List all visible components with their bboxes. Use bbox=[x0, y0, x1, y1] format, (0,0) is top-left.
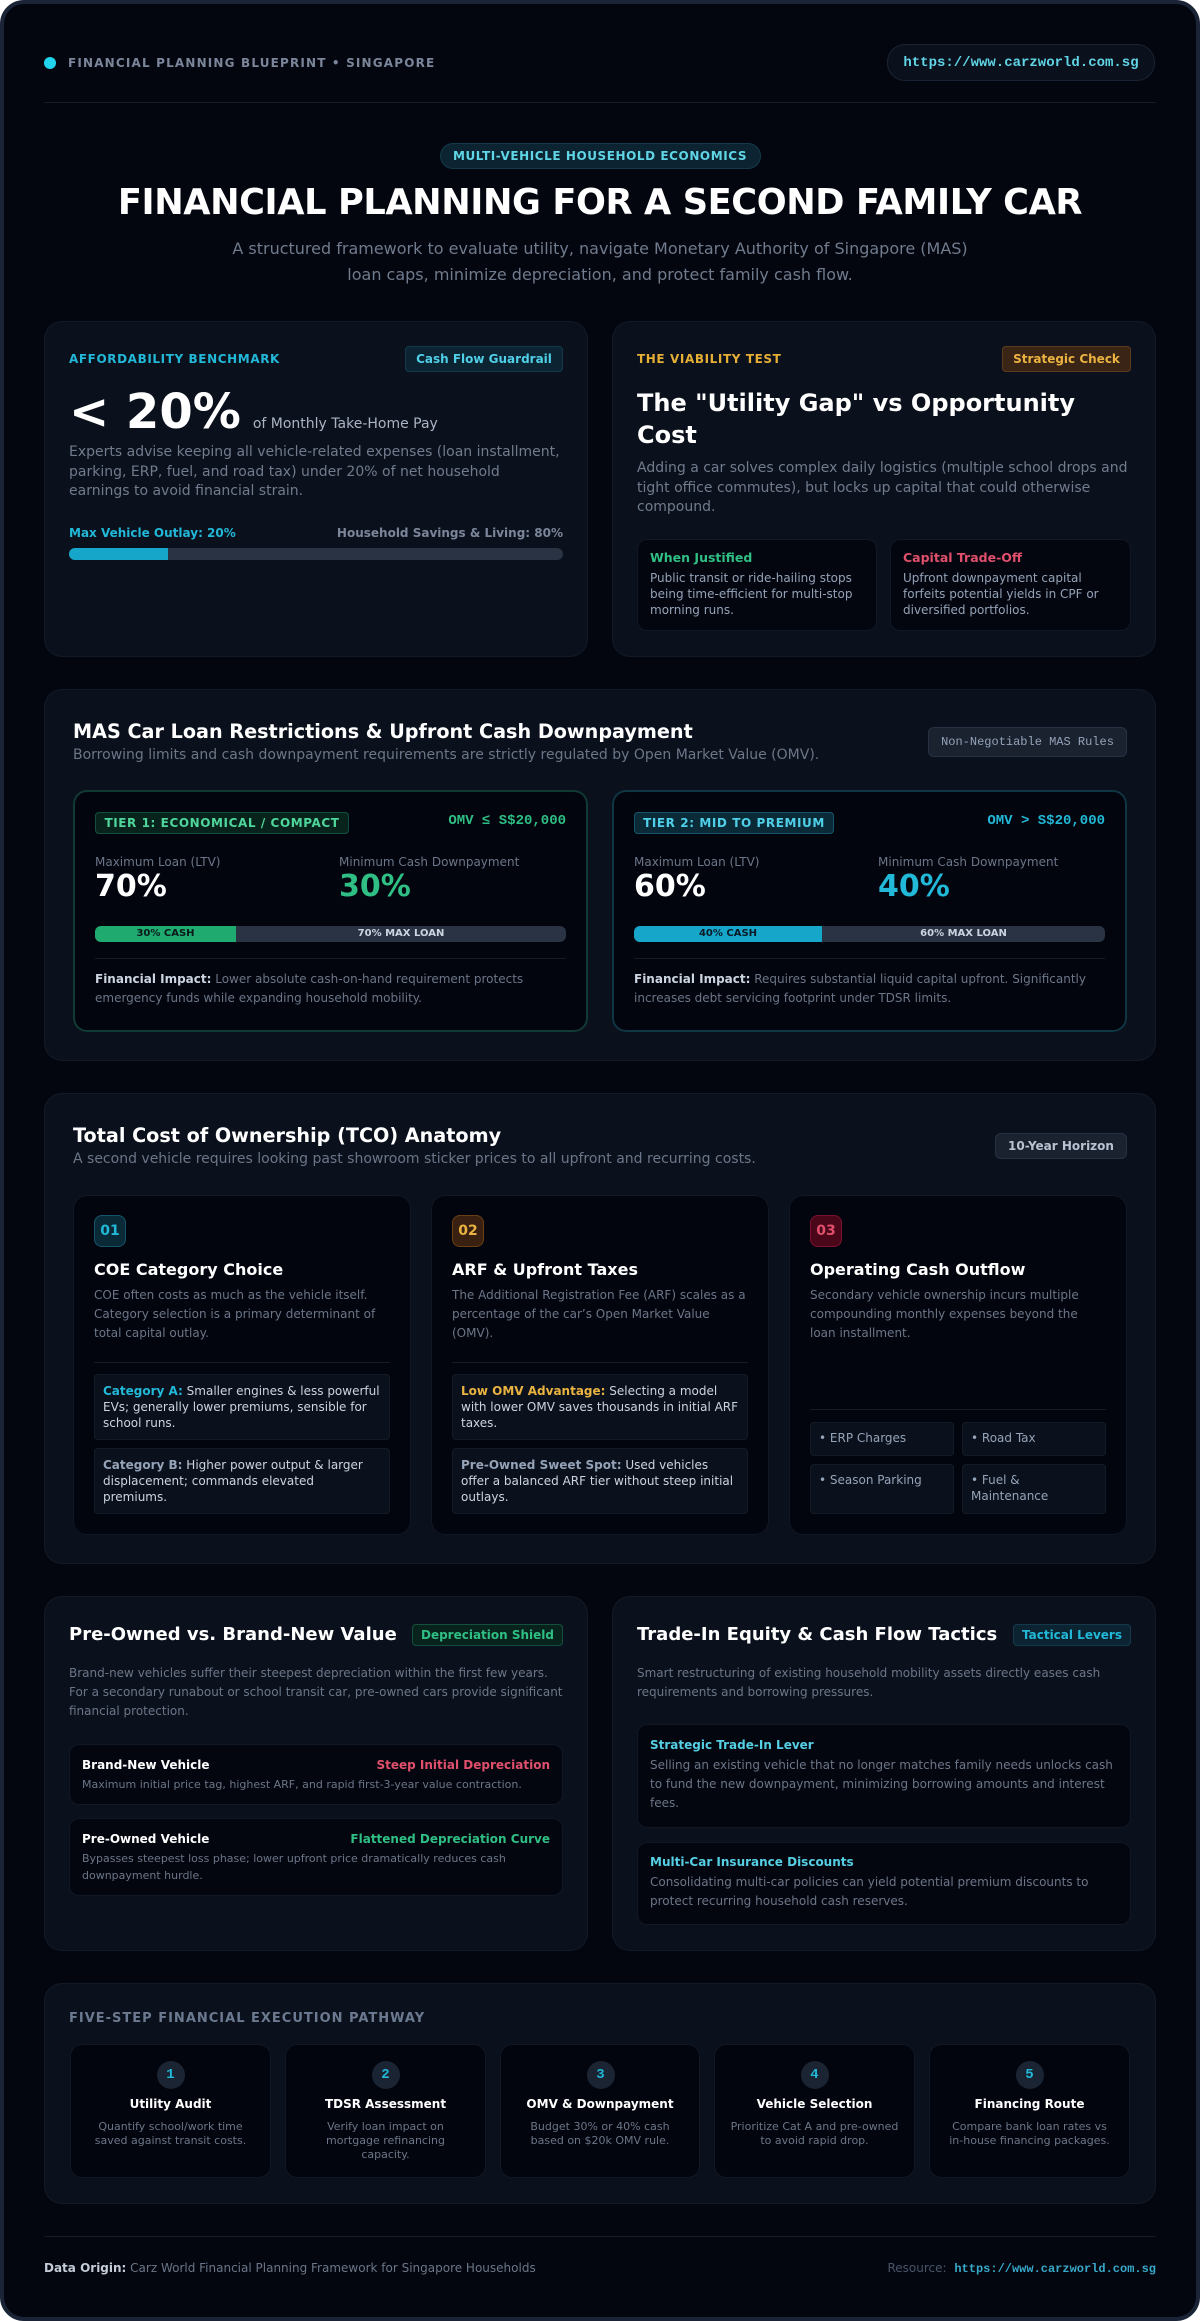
sweet spot text: Pre-Owned Sweet Spot: Used vehicles bbox=[461, 1458, 708, 1472]
expense: road tax bbox=[962, 1422, 1106, 1456]
tier badge bbox=[634, 812, 834, 834]
tactic title: Multi-Car Insurance Discounts bbox=[650, 1855, 854, 1869]
financial impact note: emergency funds while expanding household mobility. bbox=[95, 991, 422, 1005]
tier badge: TIER 1: ECONOMICAL / COMPACT bbox=[104, 816, 340, 830]
step 2 bbox=[285, 2044, 486, 2178]
panel: viability test bbox=[612, 321, 1156, 657]
financial impact note: Financial Impact: Lower absolute cash-on-hand requirement protects bbox=[95, 972, 523, 986]
step text bbox=[95, 2120, 246, 2147]
tactic: strategic trade-in bbox=[637, 1724, 1131, 1828]
tier badge: TIER 2: MID TO PREMIUM bbox=[643, 816, 825, 830]
low OMV text: taxes. bbox=[461, 1416, 497, 1430]
financial impact note bbox=[634, 972, 1086, 1005]
tag: cash flow guardrail bbox=[405, 346, 563, 372]
step text: Verify loan impact on bbox=[327, 2120, 444, 2133]
number badge 01 bbox=[94, 1215, 126, 1247]
card text: Upfront downpayment capital bbox=[903, 571, 1082, 585]
category A text bbox=[103, 1384, 380, 1430]
step text: to avoid rapid drop. bbox=[760, 2134, 869, 2147]
downpayment label: Minimum Cash Downpayment bbox=[878, 855, 1058, 869]
loan label: Maximum Loan (LTV) bbox=[95, 855, 220, 869]
panel heading: The "Utility Gap" vs Opportunity bbox=[637, 389, 1075, 417]
tag: 10-year horizon bbox=[995, 1133, 1127, 1159]
panel eyebrow: AFFORDABILITY BENCHMARK bbox=[69, 352, 280, 366]
tier card: economical compact bbox=[73, 790, 588, 1032]
tag: depreciation shield bbox=[412, 1624, 563, 1646]
row verdict: Steep Initial Depreciation bbox=[376, 1758, 550, 1772]
row title: Brand-New Vehicle bbox=[82, 1758, 210, 1772]
sweet spot text: offer a balanced ARF tier without steep initial bbox=[461, 1474, 733, 1488]
panel: five-step pathway bbox=[44, 1983, 1156, 2204]
step text: saved against transit costs. bbox=[95, 2134, 246, 2147]
card text: being time-efficient for multi-stop bbox=[650, 587, 852, 601]
step 4 bbox=[714, 2044, 915, 2178]
step text: in-house financing packages. bbox=[949, 2134, 1110, 2147]
fuel text bbox=[971, 1473, 1048, 1503]
panel description bbox=[69, 1666, 562, 1718]
road tax text: • Road Tax bbox=[971, 1431, 1036, 1445]
benchmark description: Experts advise keeping all vehicle-related expenses (loan installment, bbox=[69, 444, 560, 460]
financial impact note: increases debt servicing footprint under TDSR limits. bbox=[634, 991, 951, 1005]
financial impact note: Financial Impact: Requires substantial liquid capital upfront. Significantly bbox=[634, 972, 1086, 986]
footer: data origin: Data Origin: Carz World Financial Planning Framework for Singapore Households bbox=[44, 2261, 536, 2275]
card text bbox=[903, 571, 1099, 617]
tactic text: fees. bbox=[650, 1796, 679, 1810]
tag: tactical levers bbox=[1013, 1624, 1131, 1646]
tactic: multi-car insurance bbox=[637, 1842, 1131, 1925]
downpayment value: 30% bbox=[339, 869, 411, 904]
panel: total cost of ownership bbox=[44, 1093, 1156, 1564]
tag: tactical levers: Tactical Levers bbox=[1022, 1628, 1122, 1642]
step number: 4 bbox=[810, 2067, 819, 2083]
card text: diversified portfolios. bbox=[903, 603, 1030, 617]
header eyebrow bbox=[44, 56, 435, 70]
benchmark description: earnings to avoid financial strain. bbox=[69, 483, 303, 499]
panel eyebrow: THE VIABILITY TEST bbox=[637, 352, 781, 366]
step text: Compare bank loan rates vs bbox=[952, 2120, 1107, 2133]
panel description: For a secondary runabout or school transit car, pre-owned cars provide significant bbox=[69, 1685, 562, 1699]
number badge 02: 02 bbox=[458, 1223, 478, 1239]
card description bbox=[810, 1288, 1079, 1340]
ERP text: • ERP Charges bbox=[819, 1431, 906, 1445]
step text: Quantify school/work time bbox=[98, 2120, 243, 2133]
step text: Budget 30% or 40% cash bbox=[530, 2120, 670, 2133]
comparison: pre-owned vehicle bbox=[69, 1818, 563, 1896]
category A text: school runs. bbox=[103, 1416, 176, 1430]
category B text bbox=[103, 1458, 363, 1504]
category A text: Category A: Smaller engines & less powerful bbox=[103, 1384, 380, 1398]
step 5 bbox=[929, 2044, 1130, 2178]
tier badge bbox=[95, 812, 349, 834]
tag: strategic check bbox=[1002, 346, 1131, 372]
tag: cash flow guardrail: Cash Flow Guardrail bbox=[416, 352, 552, 366]
step number bbox=[156, 2061, 184, 2089]
row description bbox=[82, 1852, 506, 1882]
category A text: EVs; generally lower premiums, sensible for bbox=[103, 1400, 367, 1414]
panel: trade-in equity bbox=[612, 1596, 1156, 1951]
card text bbox=[650, 571, 852, 617]
card description bbox=[94, 1288, 376, 1340]
split bar: 30 cash, 70 loan bbox=[95, 926, 566, 942]
panel heading: Trade-In Equity & Cash Flow Tactics bbox=[637, 1624, 997, 1645]
step text: mortgage refinancing bbox=[326, 2134, 445, 2147]
panel description: Smart restructuring of existing household mobility assets directly eases cash bbox=[637, 1666, 1100, 1680]
expense: season parking bbox=[810, 1464, 954, 1514]
step text bbox=[326, 2120, 445, 2161]
panel heading: Pre-Owned vs. Brand-New Value bbox=[69, 1624, 397, 1645]
viability description bbox=[637, 460, 1128, 515]
card heading: ARF & Upfront Taxes bbox=[452, 1260, 638, 1279]
split bar: 40 cash, 60 loan bbox=[634, 926, 1105, 942]
section subheading: A second vehicle requires looking past showroom sticker prices to all upfront and recurring costs. bbox=[73, 1151, 756, 1167]
step number bbox=[1016, 2061, 1044, 2089]
panel description: financial protection. bbox=[69, 1704, 189, 1718]
step number: 3 bbox=[596, 2067, 605, 2083]
detail: category B bbox=[94, 1448, 390, 1514]
tactic text: to fund the new downpayment, minimizing borrowing amounts and interest bbox=[650, 1777, 1105, 1791]
loan value: 60% bbox=[634, 869, 706, 904]
cash segment bbox=[95, 926, 236, 942]
card text: Public transit or ride-hailing stops bbox=[650, 571, 852, 585]
card description: total capital outlay. bbox=[94, 1326, 209, 1340]
card description: Category selection is a primary determinant of bbox=[94, 1307, 375, 1321]
category B text: displacement; commands elevated bbox=[103, 1474, 314, 1488]
expense: ERP charges bbox=[810, 1422, 954, 1456]
row description: Bypasses steepest loss phase; lower upfront price dramatically reduces cash bbox=[82, 1852, 506, 1865]
card description: COE often costs as much as the vehicle itself. bbox=[94, 1288, 367, 1302]
detail: category A bbox=[94, 1374, 390, 1440]
panel heading: Cost bbox=[637, 421, 697, 449]
card: operating cash outflow bbox=[789, 1195, 1127, 1535]
loan segment: 60% MAX LOAN bbox=[920, 928, 1007, 939]
card description: (OMV). bbox=[452, 1326, 493, 1340]
card description: compounding monthly expenses beyond the bbox=[810, 1307, 1078, 1321]
bar label: savings and living: Household Savings & Living: 80% bbox=[337, 526, 563, 540]
bar label: vehicle outlay: Max Vehicle Outlay: 20% bbox=[69, 526, 236, 540]
category B text: Category B: Higher power output & larger bbox=[103, 1458, 363, 1472]
subtitle: loan caps, minimize depreciation, and protect family cash flow. bbox=[347, 265, 853, 284]
icon: status dot bbox=[44, 57, 56, 69]
card description bbox=[452, 1288, 746, 1340]
section heading: MAS Car Loan Restrictions & Upfront Cash Downpayment bbox=[73, 720, 693, 743]
card heading: Operating Cash Outflow bbox=[810, 1260, 1025, 1279]
card description: percentage of the car’s Open Market Value bbox=[452, 1307, 710, 1321]
downpayment label: Minimum Cash Downpayment bbox=[339, 855, 519, 869]
card: when justified bbox=[637, 539, 877, 631]
website url pill bbox=[887, 44, 1155, 81]
viability description: compound. bbox=[637, 499, 715, 515]
tactic title: Strategic Trade-In Lever bbox=[650, 1738, 814, 1752]
category badge bbox=[440, 143, 760, 169]
loan label: Maximum Loan (LTV) bbox=[634, 855, 759, 869]
row verdict: Flattened Depreciation Curve bbox=[350, 1832, 550, 1846]
number badge 01: 01 bbox=[100, 1223, 120, 1239]
benchmark description: parking, ERP, fuel, and road tax) under 20% of net household bbox=[69, 464, 500, 480]
benchmark description bbox=[69, 444, 560, 499]
low OMV text: with lower OMV saves thousands in initial ARF bbox=[461, 1400, 738, 1414]
card text: forfeits potential yields in CPF or bbox=[903, 587, 1099, 601]
cash segment: 40% CASH bbox=[699, 928, 757, 939]
OMV threshold: OMV ≤ S$20,000 bbox=[448, 813, 566, 829]
viability description: tight office commutes), but locks up capital that could otherwise bbox=[637, 480, 1090, 496]
progress bar: 20 percent bbox=[69, 548, 563, 560]
card title: When Justified bbox=[650, 550, 752, 565]
panel description bbox=[637, 1666, 1100, 1699]
section subheading: Borrowing limits and cash downpayment requirements are strictly regulated by Open Market Value (OMV). bbox=[73, 747, 819, 763]
card description: loan installment. bbox=[810, 1326, 911, 1340]
tactic text: protect recurring household cash reserves. bbox=[650, 1894, 908, 1908]
tier card: mid to premium bbox=[612, 790, 1127, 1032]
category B text: premiums. bbox=[103, 1490, 167, 1504]
tag: 10-year horizon: 10-Year Horizon bbox=[1008, 1139, 1114, 1153]
sweet spot text: outlays. bbox=[461, 1490, 509, 1504]
card title: Capital Trade-Off bbox=[903, 550, 1022, 565]
expense: fuel and maintenance bbox=[962, 1464, 1106, 1514]
step text: capacity. bbox=[361, 2148, 410, 2161]
tactic text bbox=[650, 1758, 1113, 1810]
card: ARF and upfront taxes bbox=[431, 1195, 769, 1535]
card text: morning runs. bbox=[650, 603, 734, 617]
card description: Secondary vehicle ownership incurs multiple bbox=[810, 1288, 1079, 1302]
section heading: Total Cost of Ownership (TCO) Anatomy bbox=[73, 1124, 501, 1147]
number badge 02 bbox=[452, 1215, 484, 1247]
panel description: requirements and borrowing pressures. bbox=[637, 1685, 873, 1699]
detail: low OMV advantage bbox=[452, 1374, 748, 1440]
fuel text: Maintenance bbox=[971, 1489, 1048, 1503]
tactic text: Selling an existing vehicle that no longer matches family needs unlocks cash bbox=[650, 1758, 1113, 1772]
category badge: MULTI-VEHICLE HOUSEHOLD ECONOMICS bbox=[453, 149, 747, 163]
panel: MAS car loan restrictions bbox=[44, 689, 1156, 1061]
website url pill: https://www.carzworld.com.sg bbox=[903, 54, 1139, 70]
loan value: 70% bbox=[95, 869, 167, 904]
big stat: under 20 percent: < 20% of Monthly Take-Home Pay bbox=[69, 384, 438, 440]
row title: Pre-Owned Vehicle bbox=[82, 1832, 209, 1846]
step title: Utility Audit bbox=[130, 2097, 211, 2111]
comparison: brand-new vehicle bbox=[69, 1744, 563, 1805]
card: capital trade-off bbox=[890, 539, 1131, 631]
card: COE category choice bbox=[73, 1195, 411, 1535]
step text bbox=[731, 2120, 898, 2147]
tag: MAS rules: Non-Negotiable MAS Rules bbox=[941, 735, 1114, 749]
downpayment value: 40% bbox=[878, 869, 950, 904]
card heading: COE Category Choice bbox=[94, 1260, 283, 1279]
tag: strategic check: Strategic Check bbox=[1013, 352, 1120, 366]
step title: Vehicle Selection bbox=[757, 2097, 872, 2111]
sweet spot text bbox=[461, 1458, 733, 1504]
step title: OMV & Downpayment bbox=[526, 2097, 674, 2111]
low OMV text bbox=[461, 1384, 738, 1430]
detail: pre-owned sweet spot bbox=[452, 1448, 748, 1514]
step number: 2 bbox=[381, 2067, 390, 2083]
step number: 5 bbox=[1025, 2067, 1034, 2083]
tag: depreciation shield: Depreciation Shield bbox=[421, 1628, 554, 1642]
step text bbox=[949, 2120, 1110, 2147]
subtitle: A structured framework to evaluate utility, navigate Monetary Authority of Singapore (MAS) bbox=[232, 239, 968, 258]
step title: Financing Route bbox=[975, 2097, 1084, 2111]
title: FINANCIAL PLANNING FOR A SECOND FAMILY CAR bbox=[118, 182, 1082, 223]
step number bbox=[372, 2061, 400, 2089]
cash segment: 30% CASH bbox=[136, 928, 195, 939]
cash segment bbox=[634, 926, 822, 942]
OMV threshold: OMV > S$20,000 bbox=[987, 813, 1105, 829]
step number bbox=[586, 2061, 614, 2089]
fuel text: • Fuel & bbox=[971, 1473, 1020, 1487]
step text bbox=[530, 2120, 670, 2147]
step text: based on $20k OMV rule. bbox=[531, 2134, 669, 2147]
step 1 bbox=[70, 2044, 271, 2178]
step text: Prioritize Cat A and pre-owned bbox=[731, 2120, 898, 2133]
loan segment: 70% MAX LOAN bbox=[358, 928, 444, 939]
number badge 03: 03 bbox=[816, 1223, 836, 1239]
panel: pre-owned vs brand-new bbox=[44, 1596, 588, 1951]
panel heading bbox=[637, 389, 1075, 449]
step title: TDSR Assessment bbox=[325, 2097, 446, 2111]
row description: downpayment hurdle. bbox=[82, 1869, 203, 1882]
row description: Maximum initial price tag, highest ARF, and rapid first-3-year value contraction. bbox=[82, 1778, 522, 1791]
number badge 03 bbox=[810, 1215, 842, 1247]
low OMV text: Low OMV Advantage: Selecting a model bbox=[461, 1384, 717, 1398]
panel description: Brand-new vehicles suffer their steepest depreciation within the first few years. bbox=[69, 1666, 548, 1680]
step number: 1 bbox=[166, 2067, 175, 2083]
season parking text: • Season Parking bbox=[819, 1473, 922, 1487]
tactic text: Consolidating multi-car policies can yield potential premium discounts to bbox=[650, 1875, 1088, 1889]
step 3 bbox=[500, 2044, 700, 2178]
section heading: FIVE-STEP FINANCIAL EXECUTION PATHWAY bbox=[69, 2011, 425, 2026]
footer: resource link: Resource: https://www.carzworld.com.sg bbox=[887, 2261, 1156, 2276]
viability description: Adding a car solves complex daily logistics (multiple school drops and bbox=[637, 460, 1128, 476]
tag: MAS rules bbox=[928, 727, 1127, 757]
header label: FINANCIAL PLANNING BLUEPRINT • SINGAPORE bbox=[68, 56, 435, 70]
financial impact note bbox=[95, 972, 523, 1005]
step number bbox=[800, 2061, 828, 2089]
tactic text bbox=[650, 1875, 1088, 1908]
panel: affordability benchmark bbox=[44, 321, 588, 657]
subtitle bbox=[232, 239, 968, 284]
card description: The Additional Registration Fee (ARF) scales as a bbox=[452, 1288, 746, 1302]
